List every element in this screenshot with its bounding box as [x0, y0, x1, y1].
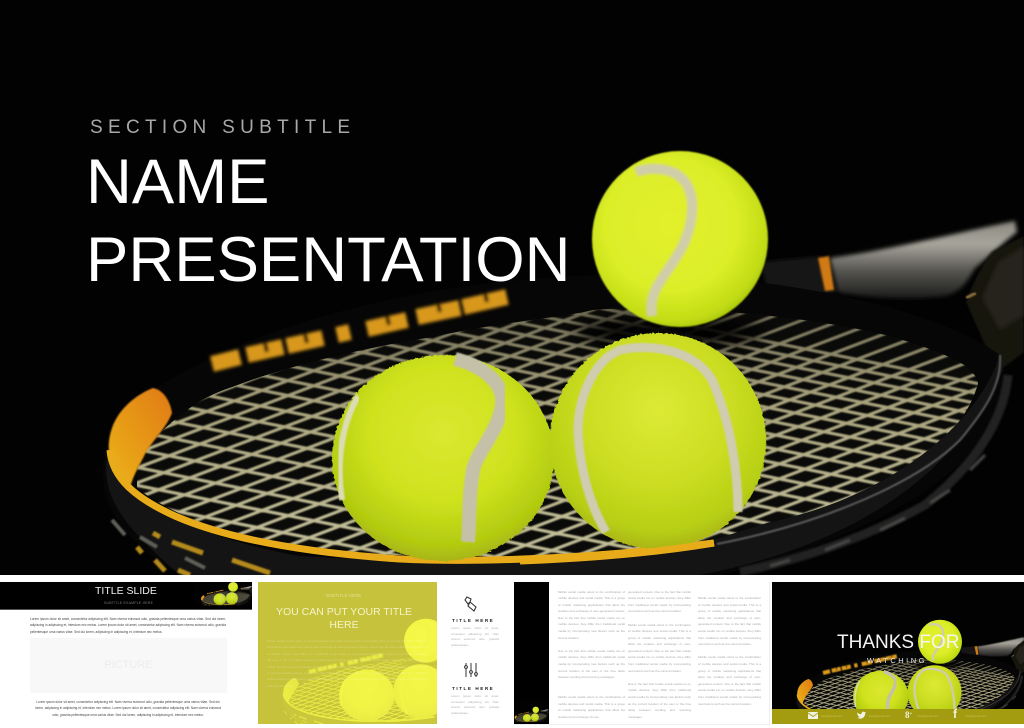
- column one: Mobile social media refers to the combination of mobile devices and social media. This is a group of mobile marketing applications that allow the creation and exchange of user-: [558, 695, 625, 719]
- tennis ball: left: [332, 355, 554, 561]
- item title two: TITLE HERE: [452, 686, 494, 691]
- tennis ball: right: [550, 333, 766, 549]
- slide title: HERE: [329, 619, 359, 631]
- contact band: [772, 709, 1024, 724]
- thumbnail: yellow title slide: [258, 582, 437, 724]
- text block: caption: Lorem ipsum dolor sit amet, consectetur adipiscing elit. Nam viverra euismod odio, gravida pellentesque urna varius vitae. Sed dui lorem, adipiscing in adipiscing et, interdum nec metus. Lorem ipsum dolor sit amet, consectetur adipiscing elit. Nam viverra euismod odio, gravida pellentesque urna varius vitae. Sed dui lorem, adipiscing in adipiscing et, interdum nec metus.: [35, 700, 221, 717]
- tennis ball: top: [592, 151, 768, 327]
- racket head: back frame: [103, 275, 1005, 575]
- icon: twitter: [857, 712, 866, 719]
- contact text: google plus: info@gmail.com: [917, 714, 939, 718]
- mini racket image: [200, 582, 252, 606]
- column one: Mobile social media refers to the combination of mobile devices and social media. This is a group of mobile marketing applications that allow the creation and exchange of user-generated content. Due to the fact that mobile social media run on mobile devices, they differ from traditional social media by incorporating new factors such as the current location.: [558, 590, 625, 640]
- shadow under top ball: [575, 318, 765, 346]
- main title: NAME: [86, 147, 269, 217]
- icon: google plus: 8+: [905, 710, 912, 720]
- mini racket image: [514, 706, 548, 722]
- title bar: [0, 582, 252, 610]
- slide subtitle: SUBTITLE HERE: [326, 593, 361, 598]
- hero photo: tennis balls on racket: [0, 0, 1024, 575]
- racket brand lettering, blurred: [212, 293, 507, 364]
- icon: sliders: [464, 663, 478, 677]
- yellow rim end in front of balls: [520, 543, 714, 561]
- contact text: facebook: info@gmail.com: [965, 714, 987, 718]
- contact text: twitter: info@gmail.com: [869, 714, 891, 718]
- thumbnail: title slide: [0, 582, 252, 725]
- watching subheading: WATCHING: [867, 656, 927, 665]
- thumbnail side panel: icon items: [437, 582, 511, 724]
- picture placeholder: PICTURE: [104, 659, 153, 671]
- duotone racket image: [282, 618, 437, 724]
- picture placeholder: [30, 638, 227, 693]
- racket front frame: [106, 350, 1008, 575]
- faint body text: Mobile social media refers to the combination of mobile devices and social media. This is a group of mobile marketing applications that allow the creation and exchange of user-generated content. Due to the fact that mobile social media run on mobile devices, they differ from traditional social media by incorporating new factors such as the current location of the user or the time delay between sending and receiving messages. Mobile social media refers to the combination of mobile devices and social media. This is a group of mobile marketing applications that allow the creation and exchange of user-generated content. Due to the fact that mobile social media run on mobile devices, they differ from traditional social media by incorporating new factors such as the current location of the user or the time delay between sending and receiving messages.: [267, 639, 428, 688]
- icon: usb stick: [464, 596, 477, 612]
- column three: Mobile social media refers to the combination of mobile devices and social media. This is a group of mobile marketing applications that allow the creation and exchange of user-generated content. Due to the fact that mobile social media run on mobile devices, they differ from traditional social media by incorporating new factors such as the current location.: [698, 655, 761, 706]
- item text two: Lorem ipsum dolor sit amet, consetetur adipiscing elit. Nam viverra euismod odio, gravida pellentesque.: [451, 694, 499, 714]
- racket strings: [137, 308, 1014, 722]
- black side bar: [514, 582, 549, 724]
- icon: facebook: f: [953, 707, 957, 721]
- column three: Mobile social media refers to the combination of mobile devices and social media. This is a group of mobile marketing applications that allow the creation and exchange of user-generated content. Due to the fact that mobile social media run on mobile devices, they differ from traditional social media by incorporating new factors such as the current location.: [698, 596, 761, 646]
- slide title: YOU CAN PUT YOUR TITLE: [276, 606, 412, 618]
- column two: generated content. Due to the fact that mobile social media run on mobile devices, they differ from traditional social media by incorporating new factors such as the current location.: [628, 590, 691, 613]
- item text one: Lorem ipsum dolor sit amet, consetetur adipiscing elit. Nam viverra euismod odio, gravida pellentesque.: [451, 626, 499, 646]
- column two: [628, 590, 691, 719]
- column two: Mobile social media refers to the combination of mobile devices and social media. This is a group of mobile marketing applications that allow the creation and exchange of user-generated content. Due to the fact that mobile social media run on mobile devices, they differ from traditional social media by incorporating new factors such as the current location.: [628, 622, 691, 673]
- slide subtitle: SUBTITLE EXAMPLE HERE: [104, 601, 153, 605]
- column two: Due to the fact that mobile social media run on mobile devices, they differ from traditional social media by incorporating new factors such as the current location of the user or the time delay between sending and receiving messages.: [628, 682, 691, 719]
- racket throat and handle: [760, 221, 1024, 368]
- thumbnail: thanks for watching: [772, 582, 1024, 724]
- slide title: TITLE SLIDE: [95, 585, 157, 597]
- icon: envelope: [808, 712, 818, 719]
- slide title: [276, 606, 412, 631]
- thanks heading: THANKS FOR: [837, 632, 959, 653]
- main title: [86, 147, 571, 295]
- text block: intro: Lorem ipsum dolor sit amet, consectetur adipiscing elit. Nam viverra euismod odio, gravida pellentesque urna varius vitae. Sed dui lorem, adipiscing in adipiscing et, interdum nec metus. Lorem ipsum dolor sit amet, consectetur adipiscing elit. Nam viverra euismod odio, gravida pellentesque urna varius vitae. Sed dui lorem, adipiscing in adipiscing et, interdum nec metus.: [30, 616, 226, 634]
- main title: PRESENTATION: [86, 225, 571, 295]
- column one: Due to the fact that mobile social media run on mobile devices, they differ from traditional social media by incorporating new factors such as the current location of the user or the time delay between sending and receiving messages.: [558, 649, 625, 679]
- column three: [698, 596, 761, 706]
- section subtitle: SECTION SUBTITLE: [90, 117, 355, 138]
- item title one: TITLE HERE: [452, 618, 494, 623]
- racket photo: [796, 620, 1024, 709]
- contact text: mail: info@gmail.com: [821, 714, 843, 718]
- column one: [558, 590, 625, 719]
- thumbnail: three column text slide: [514, 582, 770, 725]
